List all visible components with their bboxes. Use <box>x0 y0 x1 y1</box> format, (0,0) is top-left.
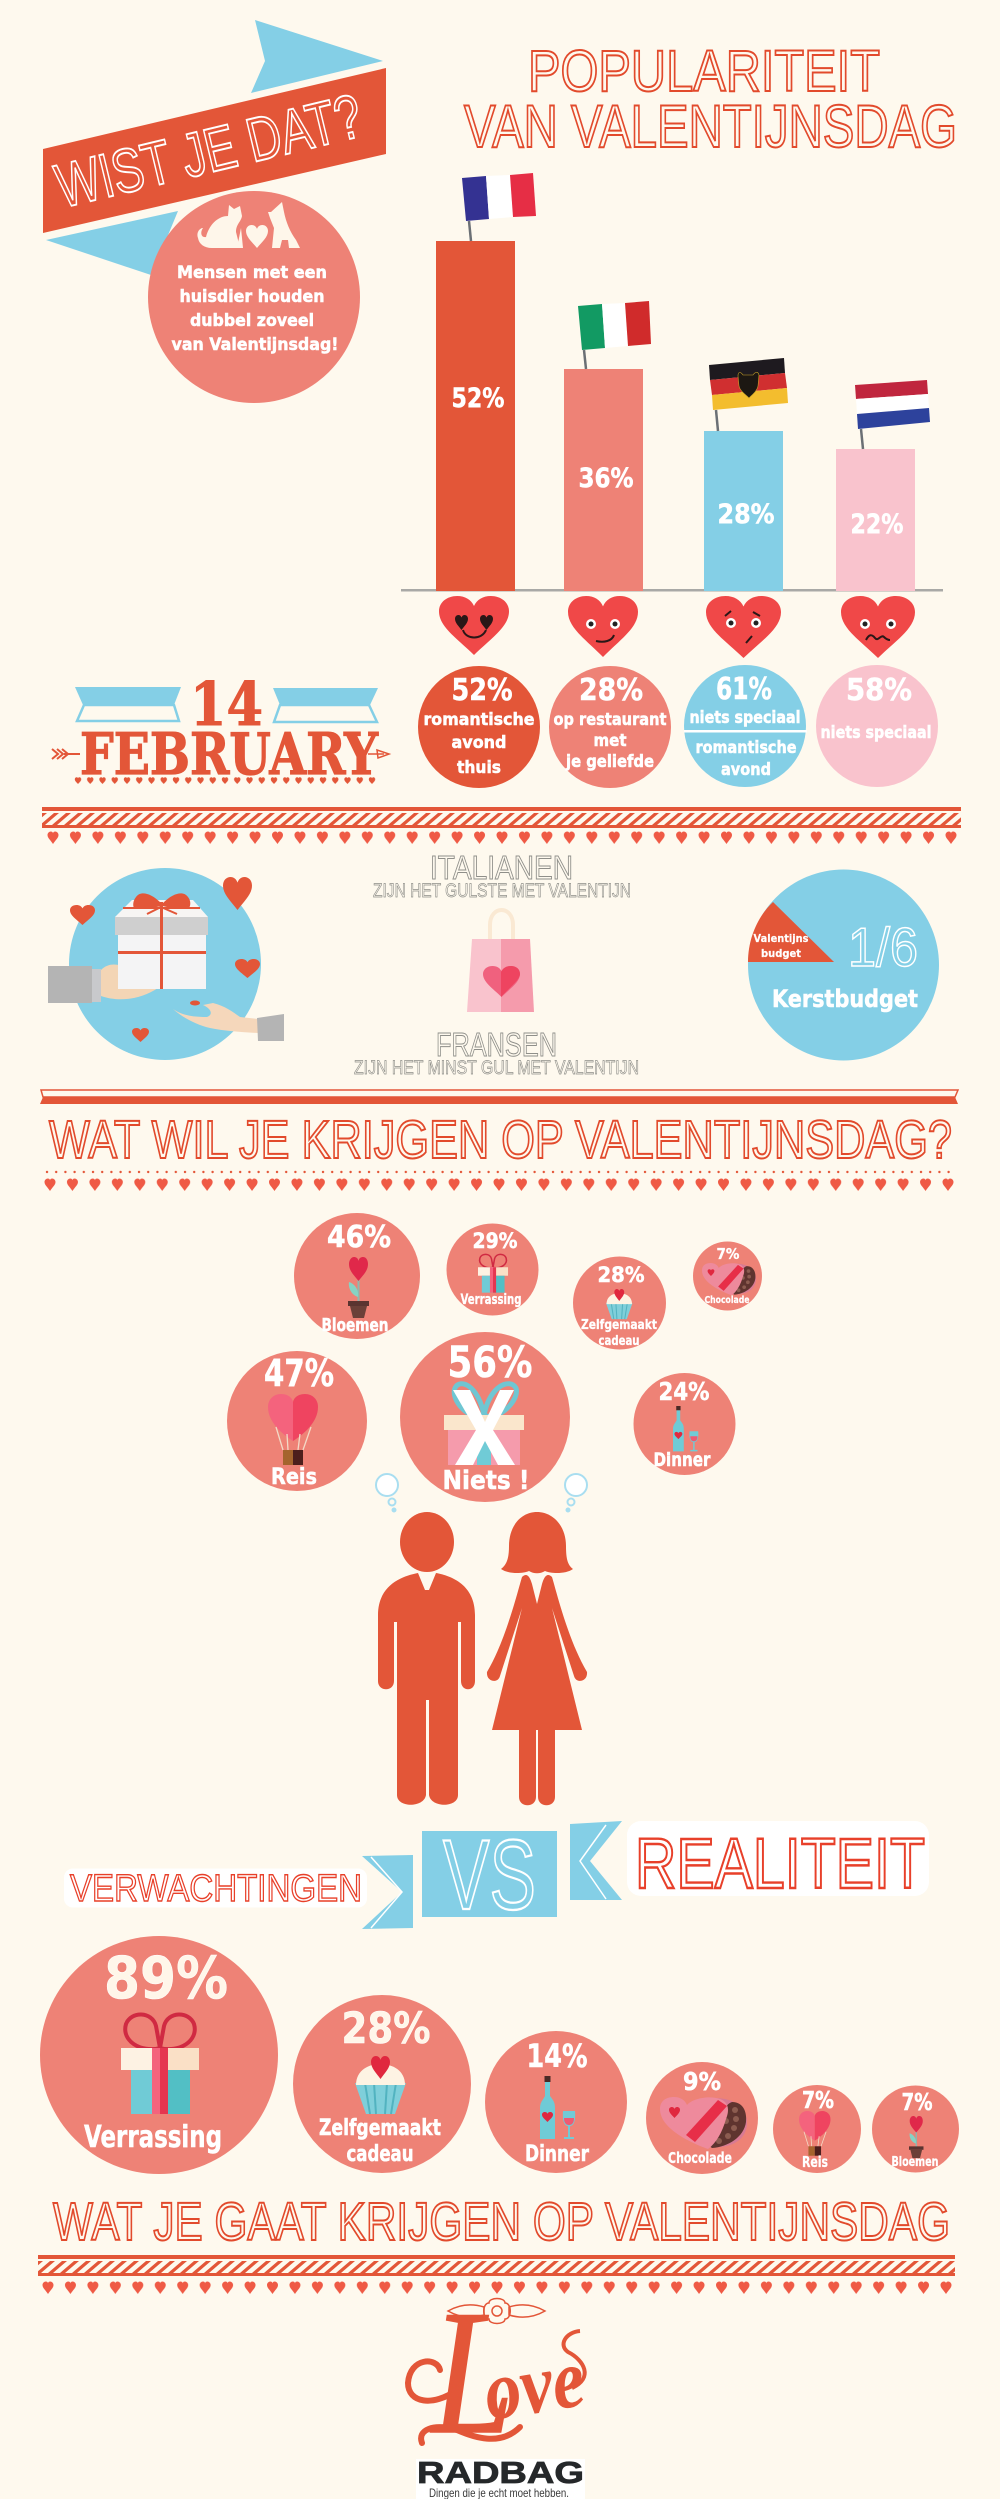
flag: Germany <box>709 358 788 431</box>
flag: Netherlands <box>855 380 930 449</box>
pie: Valentijnsbudget 1/6 of Kerstbudget <box>748 870 939 1060</box>
stat circle: 52% romantische avond thuis: avond <box>452 733 506 753</box>
stat circle: 52% romantische avond thuis <box>418 666 540 788</box>
text: Italianen: ITALIANEN <box>430 849 573 886</box>
stat circle: 28% op restaurant met je geliefde: met <box>594 731 626 751</box>
label: Verwachtingen: VERWACHTINGEN <box>70 1868 362 1910</box>
bar: Italy 36% <box>564 369 643 591</box>
callout: pets fact circle: huisdier houden <box>180 287 324 307</box>
stat circle: 58% niets speciaal: 58% <box>846 673 912 708</box>
stat circle: 28% op restaurant met je geliefde: 28% <box>579 673 643 708</box>
flag: France <box>462 173 536 241</box>
wish bubble: 7% Chocolade <box>693 1242 762 1310</box>
text: Italianen: ZIJN HET GULSTE MET VALENTIJN <box>373 881 631 902</box>
thought bubble: man <box>376 1474 398 1512</box>
wish bubble: 24% Dinner <box>634 1373 736 1475</box>
stat circle: 58% niets speciaal: niets speciaal <box>820 723 932 743</box>
heart face: in love <box>439 596 509 655</box>
thought bubble: woman <box>565 1474 587 1512</box>
reality bubble: 14% Dinner <box>485 2031 627 2173</box>
pie: Valentijnsbudget 1/6 of Kerstbudget: 1/6 <box>848 916 918 978</box>
divider: striped band with hearts <box>38 2255 955 2296</box>
wish bubble: 7% Chocolade: Chocolade <box>704 1295 750 1306</box>
reality bubble: 14% Dinner: Dinner <box>525 2142 589 2167</box>
ribbon: Wist je dat?: WIST JE DAT? <box>49 82 369 222</box>
heart face: doubtful <box>706 596 781 658</box>
heading: 14 February: FEBRUARY <box>80 721 379 788</box>
pie: Valentijnsbudget 1/6 of Kerstbudget: Valentijns <box>754 932 809 945</box>
icon: crossed out gift <box>444 1384 524 1465</box>
reality bubble: 7% Reis: Reis <box>802 2153 828 2171</box>
logo: Radbag: RADBAG <box>417 2455 584 2490</box>
pie: Valentijnsbudget 1/6 of Kerstbudget: Kerstbudget <box>772 985 918 1013</box>
reality bubble: 89% Verrassing: 89% <box>104 1944 228 2012</box>
callout: pets fact circle: van Valentijnsdag! <box>172 335 338 355</box>
stat circle: 52% romantische avond thuis: thuis <box>457 758 501 778</box>
wish bubble: 28% Zelfgemaakt cadeau: Zelfgemaakt <box>581 1318 657 1333</box>
badge: VS: VS <box>443 1819 536 1930</box>
callout: pets fact circle: dubbel zoveel <box>190 311 314 331</box>
bar chart: popularity by country <box>401 173 943 592</box>
title: Populariteit van Valentijnsdag <box>464 39 957 160</box>
illustration: gift handed over <box>48 868 284 1060</box>
reality bubble: 89% Verrassing <box>40 1936 278 2174</box>
stat circle: 61% niets speciaal / romantische avond: avond <box>721 760 771 780</box>
wish bubble: 29% Verrassing: Verrassing <box>460 1292 522 1308</box>
wish bubble: 28% Zelfgemaakt cadeau <box>573 1256 666 1350</box>
wish bubble: 24% Dinner: Dinner <box>654 1449 711 1471</box>
reality bubble: 7% Bloemen: Bloemen <box>892 2155 938 2170</box>
ribbon tail right <box>570 1821 622 1900</box>
reality bubble: 7% Reis: 7% <box>802 2088 834 2114</box>
figure: man <box>378 1512 475 1805</box>
stat circle: 52% romantische avond thuis: romantische <box>424 710 534 730</box>
bar: Italy 36%: 36% <box>578 463 634 494</box>
text: Fransen <box>354 1026 639 1079</box>
reality bubble: 28% Zelfgemaakt cadeau: cadeau <box>346 2142 414 2167</box>
heading: 14 February <box>52 670 389 788</box>
flourishes <box>408 2361 457 2401</box>
wish bubble: 47% Reis <box>227 1351 367 1491</box>
wish bubble: 47% Reis: 47% <box>264 1352 334 1395</box>
wish bubble: 29% Verrassing: 29% <box>472 1229 518 1253</box>
stat circle: 58% niets speciaal <box>816 665 938 787</box>
wish bubble: 47% Reis: Reis <box>271 1465 317 1490</box>
text: Fransen: ZIJN HET MINST GUL MET VALENTIJN <box>354 1058 639 1079</box>
wish bubble: 56% Niets: 56% <box>448 1338 532 1388</box>
ribbon: Wist je dat? <box>43 20 386 275</box>
ornament <box>448 2298 545 2324</box>
reality bubble: 14% Dinner: 14% <box>526 2037 588 2075</box>
pie: Valentijnsbudget 1/6 of Kerstbudget: budget <box>761 947 801 960</box>
icon: cat, heart and dog <box>197 202 300 248</box>
stat circle: 61% niets speciaal / romantische avond: niets speciaal <box>690 708 800 728</box>
flag: Italy <box>578 301 651 369</box>
wish bubble: 28% Zelfgemaakt cadeau: cadeau <box>598 1334 640 1349</box>
reality bubble: 9% Chocolade <box>646 2062 758 2174</box>
giving hand <box>101 965 158 999</box>
stat circle: 28% op restaurant met je geliefde <box>549 666 671 788</box>
text: Fransen: FRANSEN <box>436 1026 557 1063</box>
divider: red band <box>40 1090 958 1104</box>
logo: Radbag <box>416 2455 585 2499</box>
ribbon left <box>75 687 181 721</box>
stat circle: 61% niets speciaal / romantische avond <box>684 665 807 787</box>
stat circle: 61% niets speciaal / romantische avond: 61% <box>716 672 772 707</box>
stat circle: 61% niets speciaal / romantische avond: romantische <box>696 738 796 758</box>
wish bubble: 56% Niets: Niets ! <box>442 1466 530 1496</box>
stat circle: 52% romantische avond thuis: 52% <box>452 673 512 708</box>
reality bubble: 7% Reis <box>773 2085 861 2173</box>
receiving hand <box>173 1003 258 1033</box>
bar: Netherlands 22% <box>836 449 915 591</box>
logo: Love: ove <box>477 2331 591 2439</box>
wish bubble: 7% Chocolade: 7% <box>716 1245 740 1263</box>
text: Italianen <box>373 849 631 902</box>
logo: Love: L <box>430 2273 514 2471</box>
gift box <box>115 893 208 989</box>
heading: 14 February: 14 <box>190 670 263 740</box>
bar: Germany 28%: 28% <box>718 499 774 530</box>
bar: Netherlands 22%: 22% <box>850 509 904 540</box>
reality bubble: 7% Bloemen <box>872 2086 959 2172</box>
reality bubble: 7% Bloemen: 7% <box>902 2090 932 2116</box>
wish bubble: 24% Dinner: 24% <box>658 1377 710 1406</box>
heart face: worried <box>841 596 915 658</box>
ribbon tail left <box>362 1855 413 1929</box>
reality bubble: 9% Chocolade: 9% <box>683 2067 721 2096</box>
callout: pets fact circle: Mensen met een <box>177 263 327 283</box>
reality bubble: 89% Verrassing: Verrassing <box>84 2120 222 2155</box>
ribbon right <box>273 688 378 722</box>
title: Populariteit van Valentijnsdag: POPULARITEIT <box>528 39 880 104</box>
wish bubble: 29% Verrassing <box>446 1224 538 1316</box>
wish bubble: 46% Bloemen: Bloemen <box>322 1315 388 1336</box>
bar: France 52%: 52% <box>452 383 504 414</box>
stat circle: 28% op restaurant met je geliefde: je geliefde <box>565 752 654 772</box>
wish bubble: 46% Bloemen <box>294 1213 420 1339</box>
divider: dots and hearts <box>44 1170 954 1193</box>
icon: shopping bag <box>467 910 534 1012</box>
reality bubble: 28% Zelfgemaakt cadeau <box>293 1995 471 2173</box>
figure: woman <box>487 1512 587 1805</box>
logo: Love <box>408 2273 591 2471</box>
bar: France 52% <box>436 241 515 591</box>
wish bubble: 28% Zelfgemaakt cadeau: 28% <box>598 1263 644 1287</box>
bar: Germany 28% <box>704 431 783 591</box>
icon: arrow tail <box>52 749 80 759</box>
reality bubble: 28% Zelfgemaakt cadeau: 28% <box>342 2004 430 2054</box>
reality bubble: 9% Chocolade: Chocolade <box>668 2149 732 2167</box>
divider: striped band with hearts <box>42 807 961 846</box>
heart face: happy <box>568 596 638 657</box>
stat circle: 28% op restaurant met je geliefde: op restaurant <box>554 710 666 730</box>
reality bubble: 28% Zelfgemaakt cadeau: Zelfgemaakt <box>319 2116 441 2141</box>
icon: arrow head <box>368 750 389 758</box>
label: Realiteit: REALITEIT <box>635 1825 925 1904</box>
callout: pets fact circle <box>148 191 360 403</box>
wish bubble: 56% Niets <box>400 1332 570 1502</box>
wish bubble: 46% Bloemen: 46% <box>327 1220 391 1255</box>
